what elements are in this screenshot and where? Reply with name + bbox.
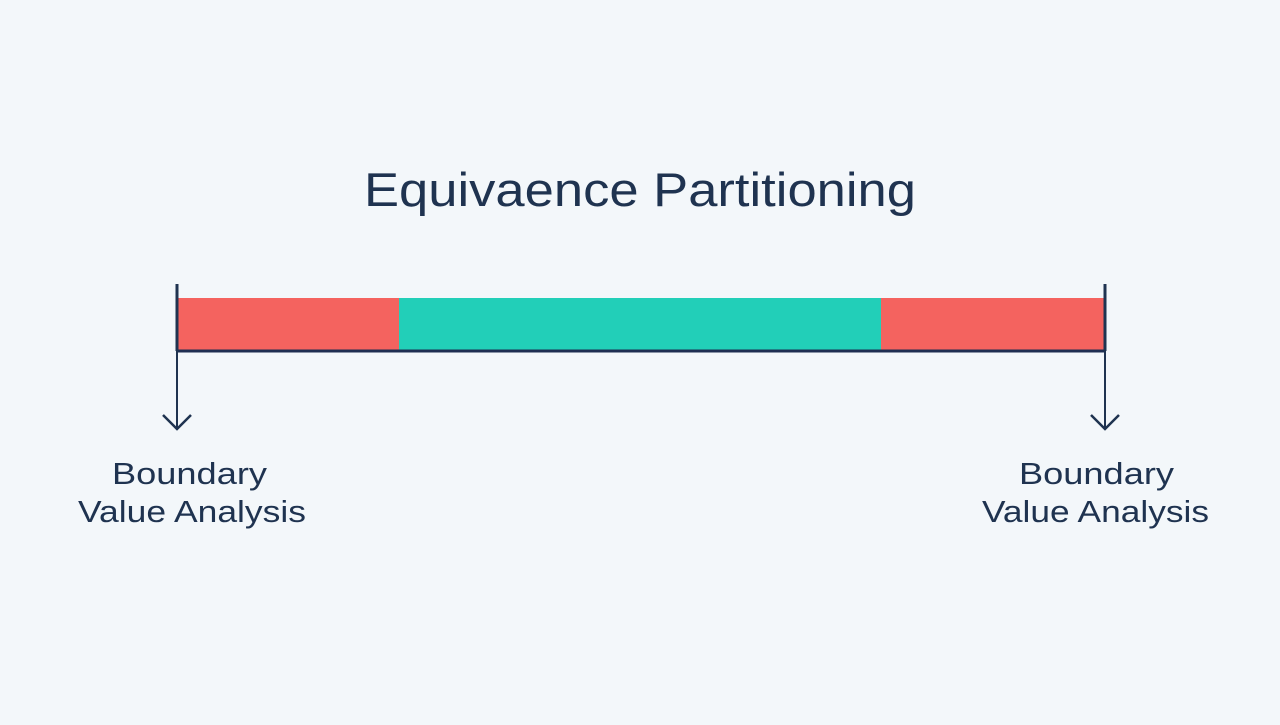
label: right boundary value analysis: Boundary	[1019, 456, 1175, 491]
segment: valid	[399, 298, 881, 350]
label: right boundary value analysis: Value Analysis	[982, 494, 1209, 529]
arrow: left boundary	[163, 284, 191, 429]
segment: invalid right	[881, 298, 1104, 350]
bar: partitions	[178, 298, 1104, 350]
arrow: right boundary	[1091, 284, 1119, 429]
label: left boundary value analysis: Boundary	[112, 456, 268, 491]
baseline	[176, 350, 1106, 352]
title: Equivaence Partitioning	[364, 163, 916, 216]
label: left boundary value analysis	[78, 456, 306, 529]
label: right boundary value analysis	[982, 456, 1209, 529]
label: left boundary value analysis: Value Analysis	[78, 494, 306, 529]
segment: invalid left	[178, 298, 399, 350]
